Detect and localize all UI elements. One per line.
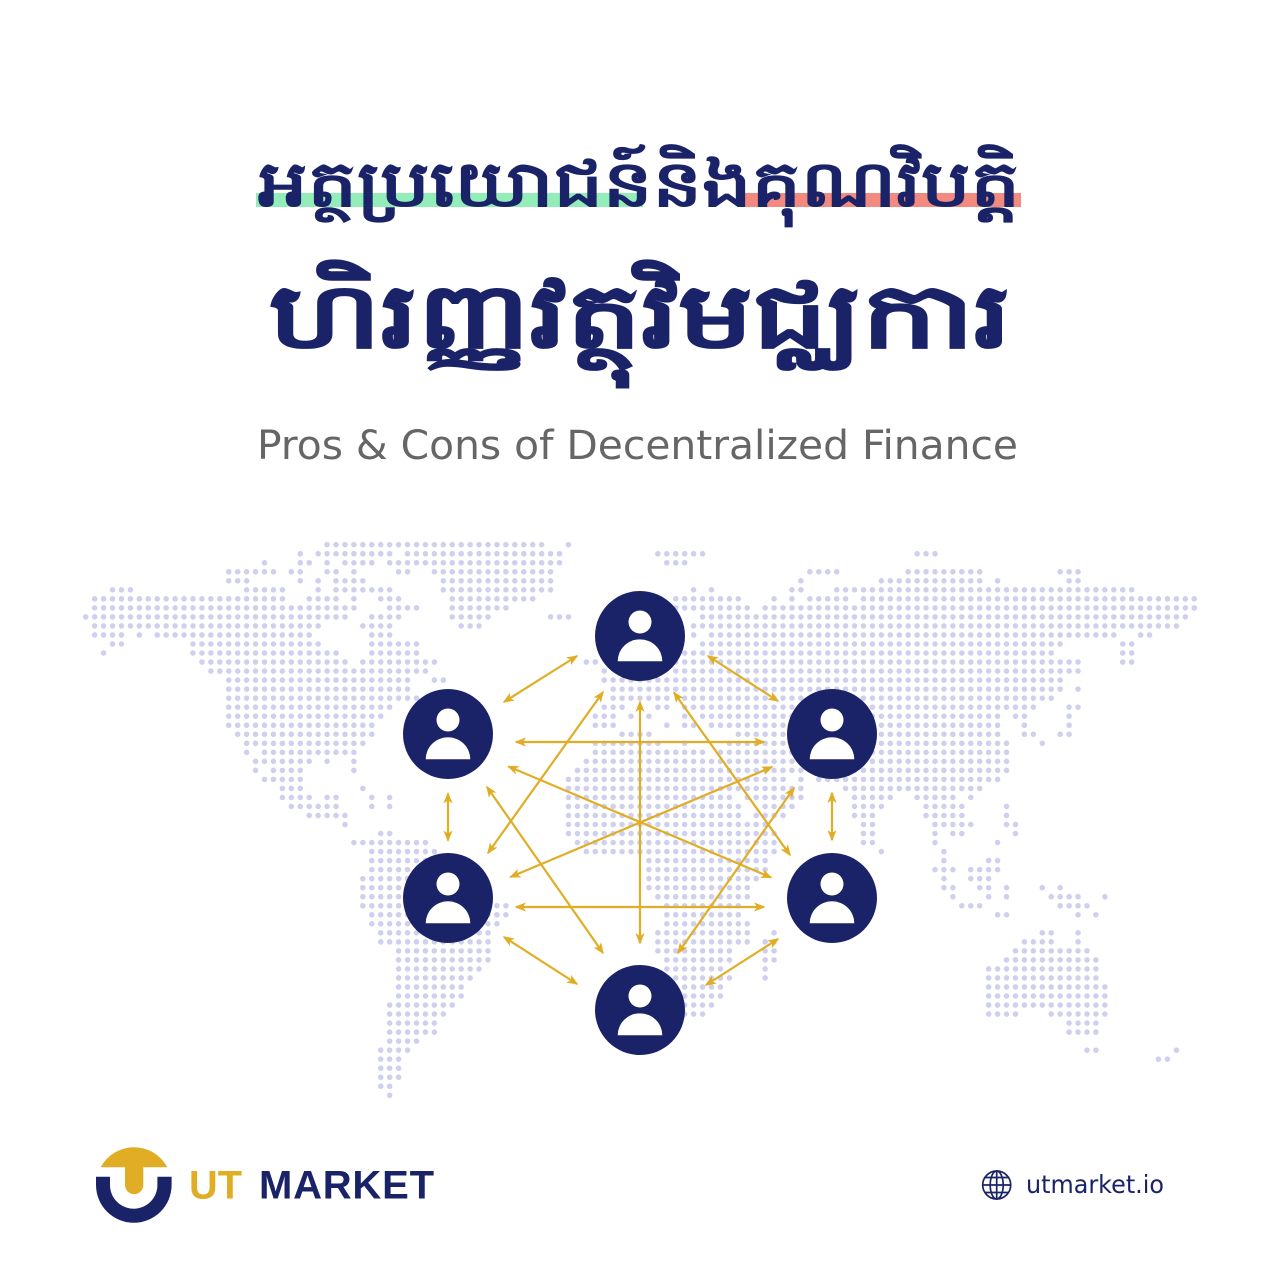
arrow: top to lower-right [674,692,790,855]
icon: globe [983,1171,1011,1199]
arrow: upper-right to bottom [678,788,794,953]
arrow: upper horizontal [516,741,764,743]
arrow: lower-left to bottom [504,937,577,984]
subtitle: Pros & Cons of Decentralized Finance [257,423,1018,469]
arrow: upper-left to lower-right [508,766,771,878]
arrow: top to lower-left [488,692,603,853]
user node: lower right [787,853,877,943]
logo wordmark: MARKET [259,1164,434,1208]
arrow: lower horizontal [516,906,764,908]
arrow: left vertical [447,794,449,840]
dotted world map [86,545,1194,1095]
arrow: right vertical [831,793,833,840]
user node: bottom [595,965,685,1055]
title highlights [256,193,1021,207]
arrow: lower-left to upper-right [510,767,772,877]
arrow: top to upper-left [504,656,577,702]
network arrows [448,656,832,985]
user node: upper left [403,689,493,779]
arrow: top to upper-right [708,656,778,701]
logo mark [96,1147,172,1223]
user node: top [595,591,685,681]
user node: upper right [787,689,877,779]
title line 1: អត្ថប្រយោជន៍និងគុណវិបត្តិ [258,144,1020,228]
website url: utmarket.io [1026,1170,1164,1199]
title line 2: ហិរញ្ញវត្ថុវិមជ្ឈការ [269,259,1011,388]
arrow: bottom to lower-right [706,939,778,985]
logo wordmark: UT [189,1164,242,1208]
arrow: upper-left to bottom [487,787,603,953]
user node: lower left [403,853,493,943]
arrow: centre vertical [639,702,641,943]
